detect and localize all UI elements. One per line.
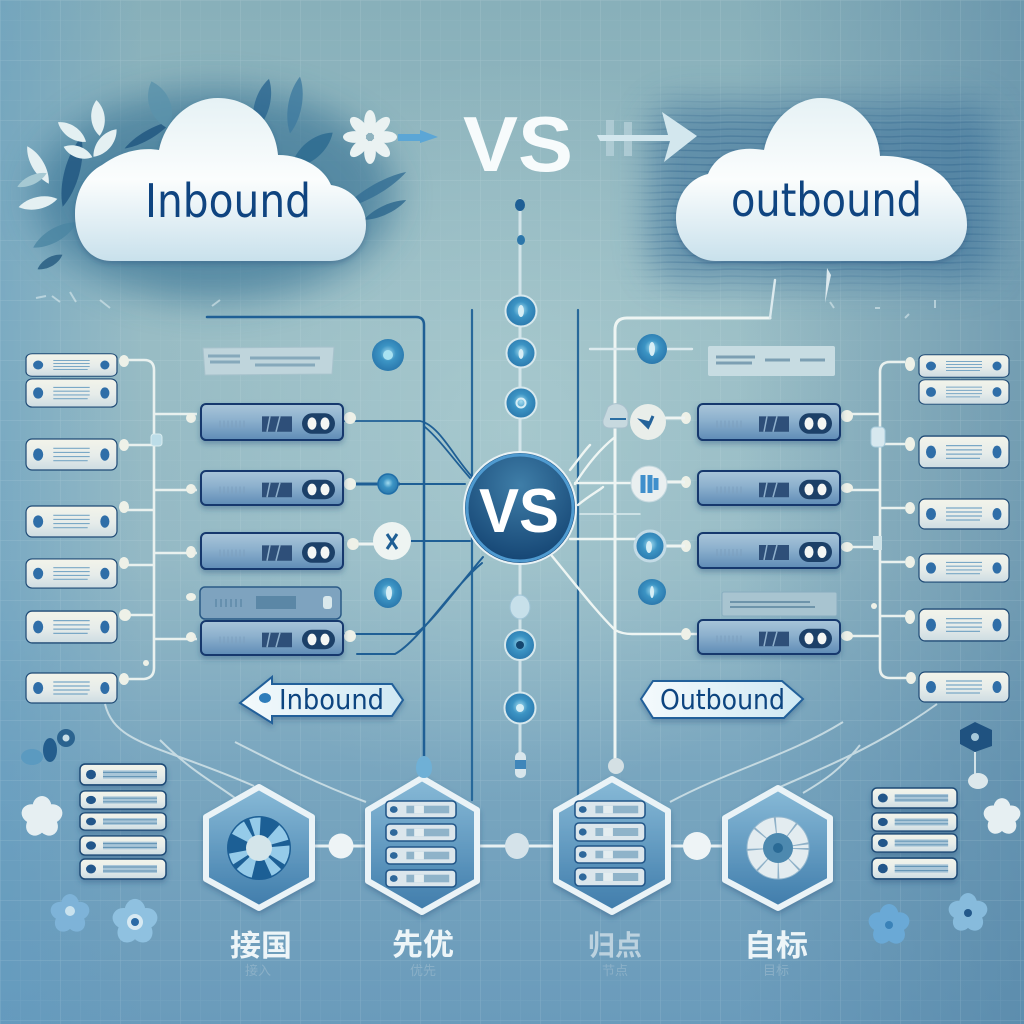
- leaves: [15, 99, 122, 213]
- faint scattered marks under clouds: [36, 292, 935, 318]
- device B4: [201, 621, 343, 655]
- device B2: [201, 471, 343, 505]
- device R5: [919, 554, 1009, 582]
- node circle 4: [505, 630, 535, 660]
- device B5: [698, 404, 840, 440]
- tag: Inbound: [240, 677, 403, 723]
- icon: white flower with arrow: [343, 110, 438, 164]
- node pill: [515, 752, 526, 778]
- faded label box top: [708, 346, 835, 376]
- icon: blue flower 1: [48, 894, 92, 935]
- vertical line end nodes: [416, 756, 624, 778]
- centre VS badge: [464, 452, 576, 564]
- tag: Outbound: Outbound: [660, 683, 785, 716]
- device L4: [26, 506, 117, 537]
- device B3: [201, 533, 343, 569]
- left status nodes: [356, 339, 411, 608]
- dial icon: [747, 817, 809, 879]
- device L2: [26, 379, 117, 407]
- device R1: [919, 355, 1009, 377]
- label: column 2: 先优: [392, 929, 454, 962]
- faint caption text under labels: 接入: [245, 963, 271, 978]
- node bars: [631, 466, 685, 502]
- faint caption text under labels: 目标: [763, 963, 789, 978]
- inbound cloud shape: [75, 98, 366, 261]
- dial icon: [227, 816, 291, 880]
- device R3: [919, 436, 1009, 468]
- icon: blue flower 3: [866, 904, 912, 948]
- icon: white flower left: [19, 796, 65, 840]
- heading: top VS: VS: [463, 100, 573, 188]
- right vertical bus: [850, 362, 908, 678]
- panel: left blue devices: [200, 347, 343, 655]
- device L1: [26, 354, 117, 376]
- links from small devices to hexagons: [105, 704, 937, 802]
- hexagon: right dial: [725, 788, 830, 908]
- left connector plugs: [119, 355, 359, 685]
- centre connection lines: [207, 200, 775, 800]
- device B8: [698, 620, 840, 654]
- device R4: [919, 499, 1009, 529]
- node circle 3: [506, 388, 536, 418]
- foliage behind inbound cloud: [30, 75, 409, 273]
- node light: [510, 595, 530, 619]
- small dots top: [515, 199, 525, 245]
- server rows: [575, 801, 645, 886]
- device B7: [698, 533, 840, 568]
- device L6: [26, 611, 117, 643]
- hexagon: right server stack: [556, 779, 668, 912]
- centre VS badge: VS: [479, 477, 559, 546]
- icon: dark gem with pin right: [960, 722, 992, 789]
- side stack: right: [872, 788, 957, 879]
- node teal lower: [638, 579, 666, 605]
- node X: [359, 522, 411, 560]
- device L3: [26, 439, 117, 470]
- heading: Outbound: outbound: [731, 173, 922, 227]
- panel: outbound cloud with streaked background: [597, 80, 1020, 300]
- panel: left column small devices: [26, 354, 117, 703]
- device R2: [919, 380, 1009, 404]
- bottom horizontal connector: [315, 844, 722, 848]
- node blue top: [637, 334, 667, 364]
- heading: Inbound: Inbound: [145, 174, 311, 228]
- label: column 4: 自标: [744, 930, 808, 963]
- device L7: [26, 673, 117, 703]
- panel: right blue devices: [698, 346, 840, 654]
- device L5: [26, 559, 117, 588]
- node circle 5: [504, 692, 536, 724]
- node circle 2: [506, 338, 536, 368]
- right connector plugs: [681, 357, 916, 684]
- label: column 3: 归点: [588, 930, 642, 961]
- centre dots column: [504, 199, 536, 778]
- node half-disc: [603, 404, 628, 428]
- node circle 1: [506, 296, 536, 326]
- faint caption text under labels: 节点: [602, 963, 628, 978]
- outbound cloud shape: [676, 98, 967, 261]
- side stack: left: [80, 764, 166, 879]
- faded label box bottom: [722, 592, 837, 616]
- icon: white flower right: [981, 798, 1023, 837]
- node cream: [630, 404, 685, 440]
- node teal: [374, 578, 402, 608]
- device R7: [919, 672, 1009, 702]
- right status nodes: [603, 334, 685, 605]
- connector nodes between hexagons: [328, 832, 711, 860]
- panel: right column small devices: [919, 355, 1009, 702]
- device R6: [919, 609, 1009, 641]
- left vertical bus: [125, 360, 197, 679]
- panel: inbound cloud with foliage: [15, 75, 438, 300]
- hexagon: left server stack: [368, 778, 477, 912]
- hexagon: left dial: [206, 787, 312, 908]
- node blue: [372, 339, 404, 371]
- faint caption text under labels: 优先: [410, 963, 436, 978]
- label: column 1: 接国: [230, 930, 292, 963]
- device B1: [201, 404, 343, 440]
- tag: Inbound: Inbound: [279, 683, 384, 716]
- icon: blue flower 2: [110, 899, 160, 947]
- faded label box: [203, 347, 334, 375]
- faded device: [200, 587, 341, 619]
- node small: [356, 474, 400, 494]
- icon: blue flower 4: [946, 893, 990, 934]
- device B6: [698, 471, 840, 505]
- server rows: [386, 801, 456, 887]
- arrow pointing to outbound cloud: [597, 112, 697, 162]
- icon: small link marker above outbound panel: [825, 268, 831, 303]
- node ring: [635, 531, 685, 561]
- icon: top-left dark ornament: [21, 729, 75, 765]
- faint caption text under labels: [245, 963, 789, 978]
